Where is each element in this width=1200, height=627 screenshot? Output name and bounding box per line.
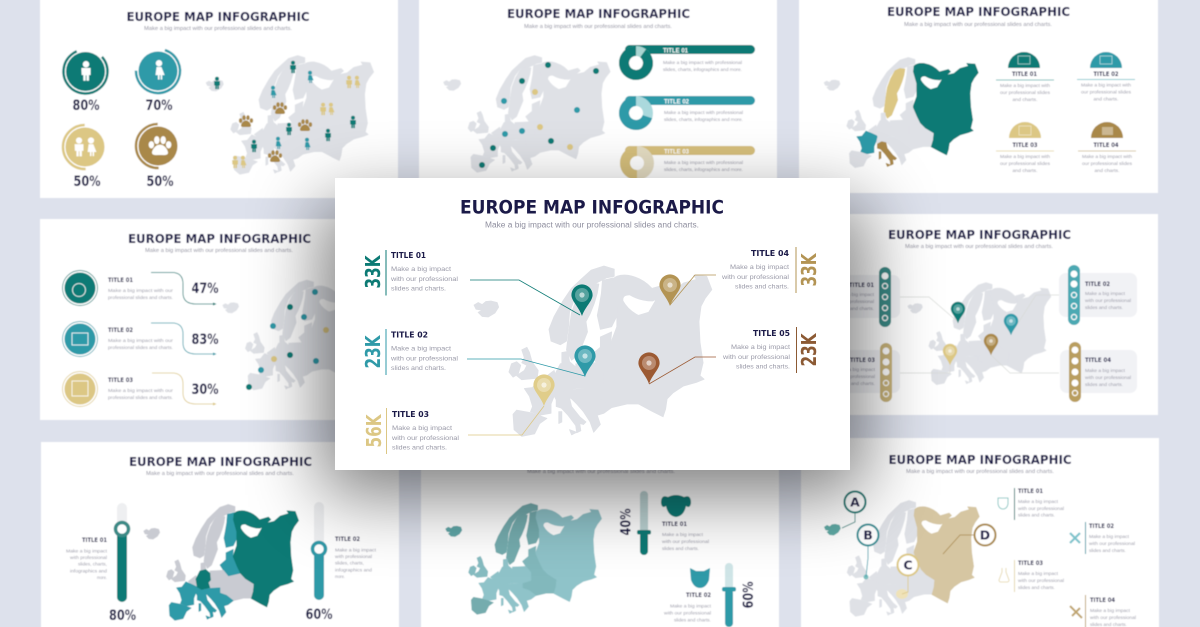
item: title 02, 23K: with our professional [390,356,459,362]
gauge: 60% [722,563,757,627]
item: title 03, 56K: slides and charts. [392,444,447,452]
text: title 01: Make a big impact [66,548,108,554]
item: title 05, 23K: slides and charts. [736,364,790,370]
progress: 80% [109,503,136,624]
item: title 03, 56K: TITLE 03 [392,410,429,419]
item: title 02, 23K [361,329,459,375]
stat: 70% women: 70% [146,98,173,114]
item: title 04: with our professional [1085,375,1131,380]
subtitle: Make a big impact with our professional slides and charts. [144,26,292,32]
stat: 80% men [55,41,116,114]
item: title 03, 56K [362,408,460,454]
item: title 03: Make a big impact [1018,571,1059,576]
item: title 01, 33K: Make a big impact [391,266,451,273]
item: title 01 [998,488,1064,520]
item: title 03: TITLE 03 [850,357,875,364]
item: title 01: Make a big impact [1018,499,1059,504]
item: title 01: slides, charts, infographics and more. [663,67,742,72]
item: title 02: slides, charts, infographics and more. [664,117,743,122]
map: grey Europe [908,283,1051,385]
pin 4 [659,274,681,306]
heading: EUROPE MAP INFOGRAPHIC [128,231,311,246]
item: title 03: with our professional [833,374,875,379]
item: title 02 [1059,265,1137,325]
item: title 03, 56K: with our professional [391,435,460,442]
item: title 04, 33K: 33K [797,252,821,286]
callout D: D [980,528,990,542]
item: title 01, 33K: with our professional [390,276,459,283]
text: title 02: Make a big impact [335,548,377,552]
item: title 02, 83%: 83% [192,332,219,348]
text: title 02: with professional [335,554,372,559]
item: title 03 [625,146,755,175]
item: title 01: TITLE 01 [1012,70,1037,78]
item: title 01: TITLE 01 [663,48,689,54]
heading: EUROPE MAP INFOGRAPHIC [888,227,1071,242]
stat: 80% men: 80% [72,98,100,114]
map: coloured countries [824,57,978,168]
stat: 50% pets [136,124,180,190]
text: title 01: TITLE 01 [662,521,687,528]
item: title 02: Make a big impact [1089,534,1130,539]
item: title 04, 33K: Make a big impact [730,264,789,271]
item: title 02: with our professional [1085,298,1131,303]
panel: thermometers slide [421,430,779,627]
text: title 02: infographics and [335,568,373,572]
item: title 01 [996,52,1054,102]
text: title 02: slides and charts. [674,618,711,622]
item: title 02: TITLE 02 [1089,523,1114,530]
icon: dog [661,495,691,517]
text: title 01: Make a big impact [662,532,704,537]
item: title 01, 47%: 47% [192,281,219,297]
item: title 02, 83%: Make a big impact with our [108,338,174,343]
item: title 04 [1060,342,1137,402]
item: title 04: TITLE 04 [1085,357,1111,364]
item: title 01: with our professional [832,299,874,304]
item: title 04, 33K: with our professional [721,274,790,281]
item: title 04: Make a big impact [1090,608,1131,613]
subtitle: Make a big impact with our professional slides and charts. [145,248,293,254]
item: title 03: slides, charts, infographics and more. [664,167,743,172]
item: title 01, 47%: Make a big impact with our [108,288,174,293]
callout C [898,554,918,594]
item: title 03, 30%: Make a big impact with our [108,388,174,393]
panel: highlighted countries slide [799,0,1158,193]
text: title 01 [66,537,108,580]
item: title 01, 33K: slides and charts. [391,286,446,292]
stat: 50% pets: 50% [146,174,174,190]
map dots [479,62,599,168]
stat: 50% couples: 50% [74,174,101,190]
item: title 04: and charts. [1094,168,1120,173]
callout D [943,524,996,554]
item: title 01, 33K: TITLE 01 [391,251,426,260]
item: title 04, 33K [721,247,821,293]
text: title 01: slides and charts. [662,546,699,551]
item: title 03: TITLE 03 [664,150,690,156]
item: title 03: slides and charts. [1018,585,1055,590]
item: title 02, 23K: Make a big impact [391,346,451,352]
item: title 03 [999,560,1064,592]
item: title 01 [619,45,755,80]
map: teal Europe [446,503,602,614]
item: title 03: TITLE 03 [1012,141,1038,149]
item: title 03 [820,343,900,402]
item: title 03, 30%: 30% [192,382,219,398]
item: title 02, 23K: 23K [361,334,385,368]
item: title 05, 23K: 23K [797,332,821,366]
subtitle: Make a big impact with our professional slides and charts. [524,24,672,30]
item: title 01, 47% [62,270,219,306]
item: title 03, 56K: 56K [362,413,386,448]
text: title 01: TITLE 01 [82,537,107,544]
item: title 02, 23K: TITLE 02 [391,330,428,340]
item: title 01, 47%: TITLE 01 [108,278,133,284]
item: title 04, 33K: TITLE 04 [751,249,789,258]
item: title 04: our professional slides [1082,161,1133,166]
item: title 04, 33K: slides and charts. [735,284,789,290]
item: title 03, 30% [62,372,219,406]
map dots [246,289,329,390]
centre slide shadow [322,203,864,495]
progress: 60% [306,502,333,623]
item: title 02, 83%: professional slides and charts. [108,345,173,350]
item: title 01: slides and charts. [1018,512,1055,518]
item: title 02 [1070,522,1135,554]
item: title 02 [1077,52,1135,102]
item: title 03: Make a big impact with professional [664,160,743,165]
item: title 01: TITLE 01 [1018,488,1043,495]
subtitle: Make a big impact with our professional slides and charts. [905,244,1053,250]
panel: percentage arrows slide [40,219,398,420]
text: title 01 [662,521,709,551]
item: title 03, 30%: professional slides and charts. [108,395,173,400]
item: title 04: TITLE 04 [1094,141,1119,149]
item: title 01, 33K [361,250,459,296]
gauge: 40%: 40% [618,508,634,536]
item: title 02, 83%: TITLE 02 [108,328,133,334]
progress: 60%: 60% [306,607,333,623]
panel: donut charts slide [419,0,777,190]
subtitle: Make a big impact with our professional slides and charts. [906,469,1054,475]
progress: 80%: 80% [109,608,136,624]
item: title 03: our professional slides [1000,161,1051,166]
heading: EUROPE MAP INFOGRAPHIC [129,454,312,469]
text: title 01: with professional [70,555,107,560]
item: title 01, 33K: 33K [361,254,385,288]
text: title 02 [335,536,377,579]
text: title 02: TITLE 02 [686,592,711,599]
item: title 05, 23K: TITLE 05 [753,329,790,338]
pin 2 [574,345,596,377]
text: title 02: slides, charts, [335,560,364,566]
panel: lettered callouts slide [801,438,1159,627]
item: title 01: Make a big impact [834,292,875,297]
item: title 02: Make a big impact with [1081,82,1131,88]
panel: pills and pins slide [800,214,1158,415]
item: title 04 [1078,122,1136,173]
pin 5 [638,352,660,384]
subtitle: Make a big impact with our professional slides and charts. [904,22,1052,28]
item: title 03: and charts. [1012,168,1038,173]
callout B: B [863,528,873,542]
item: title 03: Make a big impact [835,367,876,372]
item: title 04 [1070,595,1136,627]
item: title 02: slides and charts. [1089,548,1126,553]
item: title 04: Make a big impact with [1082,154,1132,159]
item: title 01: slides and charts. [836,306,874,311]
item: title 05, 23K: Make a big impact [731,344,790,351]
map: grey Europe [444,55,610,172]
map: grey Europe [223,280,377,390]
heading: EUROPE MAP INFOGRAPHIC [887,4,1070,19]
item: title 03: with our professional [1018,578,1064,583]
text: title 02: TITLE 02 [335,536,360,543]
item: title 02, 23K: slides and charts. [391,365,446,372]
item: title 02 [621,96,755,128]
item: title 01: TITLE 01 [849,282,874,289]
item: title 02: Make a big impact with professional [664,110,743,115]
stat: 70% women [130,43,186,114]
item: title 02: with our professional [1089,541,1135,546]
map icons [214,61,360,168]
item: title 05, 23K: with our professional [722,354,791,361]
item: title 02: TITLE 02 [1085,281,1110,288]
item: title 03 [996,122,1054,173]
item: title 04: slides and charts. [1085,382,1123,387]
heading: EUROPE MAP INFOGRAPHIC [460,198,724,218]
heading: EUROPE MAP INFOGRAPHIC [507,6,690,21]
subtitle: Make a big impact with our professional slides and charts. [146,471,294,477]
item: title 04: Make a big impact [1085,368,1126,373]
stat: 50% couples [63,125,107,190]
text: title 02: Make a big impact [670,604,712,608]
item: title 02: slides and charts. [1085,305,1123,310]
pin 3 [533,374,555,406]
gauge: 40% [618,491,651,555]
item: title 03: TITLE 03 [1018,560,1043,567]
panel: progress bars slide [41,442,399,627]
text: title 01: slides, charts, [78,562,107,566]
item: title 02: TITLE 02 [664,100,690,106]
map: coloured regions [144,504,299,620]
callout C: C [903,558,913,572]
map: tan Russia [824,500,979,616]
callout B [858,524,878,577]
item: title 04: TITLE 04 [1090,597,1115,604]
callout A [842,492,866,528]
item: title 02, 83% [62,322,219,356]
item: title 02: our professional slides [1081,90,1132,94]
item: title 02: TITLE 02 [1094,70,1118,78]
subtitle: Make a big impact with our professional slides and charts. [527,469,675,475]
pin 1 [571,284,593,316]
heading: EUROPE MAP INFOGRAPHIC [888,452,1072,467]
item: title 05, 23K [722,327,821,373]
map pins [900,295,1059,373]
item: title 01: with our professional [1018,506,1064,511]
item: title 03: Make a big impact with [1000,154,1050,159]
item: title 03, 56K: Make a big impact [392,425,452,432]
text: title 01: with our professional [662,539,709,544]
item: title 01: Make a big impact with [1000,83,1050,88]
text: title 02: more. [335,574,345,579]
map highlight spots [864,574,908,599]
item: title 01: Make a big impact with professional [663,60,742,65]
leader lines [467,275,716,435]
item: title 01, 47%: professional slides and charts. [108,295,173,300]
item: title 02: and charts. [1094,96,1118,102]
icon: cat [690,568,710,588]
callout A: A [850,494,860,510]
item: title 04: slides and charts. [1090,622,1127,627]
item: title 01: and charts. [1012,97,1038,102]
item: title 01: our professional slides [1000,90,1051,95]
item: title 03, 30%: TITLE 03 [108,378,133,384]
text: title 02 [664,592,712,622]
item: title 03: slides and charts. [837,381,875,386]
item: title 04: with our professional [1090,615,1136,620]
panel: main centre slide [335,178,850,470]
panel: people and pets slide [40,0,398,198]
text: title 02: with our professional [664,610,711,616]
map: grey Europe [206,56,374,174]
item: title 01 [820,267,900,327]
subtitle: Make a big impact with our professional slides and charts. [485,220,699,230]
text: title 01: infographics and [70,568,108,574]
map: grey Europe [474,266,712,436]
heading: EUROPE MAP INFOGRAPHIC [126,9,310,24]
item: title 02: Make a big impact [1085,291,1126,296]
text: title 01: more. [97,575,107,580]
gauge: 60%: 60% [741,581,757,608]
